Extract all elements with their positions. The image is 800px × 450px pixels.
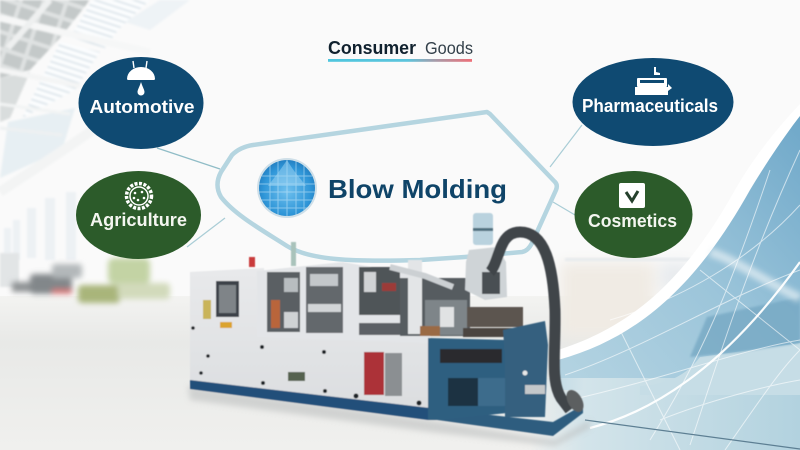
blurred door xyxy=(0,253,19,287)
yellow labels xyxy=(203,300,211,319)
panel: Cosmetics xyxy=(574,171,692,258)
ceiling xyxy=(0,0,190,192)
title underline xyxy=(328,59,472,62)
beacon and mast xyxy=(249,257,255,267)
blurred plants xyxy=(78,258,170,303)
hexagon frame around blow molding xyxy=(218,112,557,261)
control screen xyxy=(216,281,239,317)
red panel and vent xyxy=(364,352,384,395)
wall band xyxy=(565,258,695,261)
hopper xyxy=(473,213,493,245)
blue frame xyxy=(428,338,507,420)
label: Cosmetics: Cosmetics xyxy=(588,211,677,231)
machine shadow xyxy=(188,386,590,446)
hose end xyxy=(563,387,587,415)
title: Consumer Goods xyxy=(328,37,473,62)
connector lines xyxy=(157,125,582,247)
brown barrel block xyxy=(467,307,523,327)
blurred back wall xyxy=(560,262,690,337)
machinery core xyxy=(400,278,470,336)
swoosh: blue wave panel xyxy=(530,104,800,450)
label: Agriculture: Agriculture xyxy=(90,210,187,230)
icon: check box xyxy=(619,183,645,208)
title: Consumer Goods: Goods xyxy=(425,38,473,58)
corrugated hose xyxy=(490,232,570,410)
blow molding machine xyxy=(188,213,590,446)
icon: pill machine xyxy=(635,67,672,95)
icon: globe xyxy=(257,158,317,218)
panel: Agriculture xyxy=(76,171,201,259)
heading: Blow Molding: Blow Molding xyxy=(328,174,507,204)
panel: Pharmaceuticals xyxy=(572,58,734,146)
extruder assembly xyxy=(465,247,507,300)
icon: gear xyxy=(126,184,152,208)
swoosh lines xyxy=(565,150,800,450)
title: Consumer Goods: Consumer xyxy=(328,37,416,58)
hall windows xyxy=(4,192,76,260)
glass enclosure xyxy=(257,262,430,343)
label: Pharmaceuticals: Pharmaceuticals xyxy=(582,96,718,116)
machine base xyxy=(190,379,428,420)
blue drive block xyxy=(503,321,548,417)
blurred cars xyxy=(12,264,82,294)
icon: dome with drop xyxy=(127,61,155,96)
small plate xyxy=(288,372,305,381)
label: Automotive: Automotive xyxy=(90,97,194,117)
panel: Automotive xyxy=(78,57,204,149)
left cabinet xyxy=(190,268,430,408)
hall floor xyxy=(0,296,800,450)
